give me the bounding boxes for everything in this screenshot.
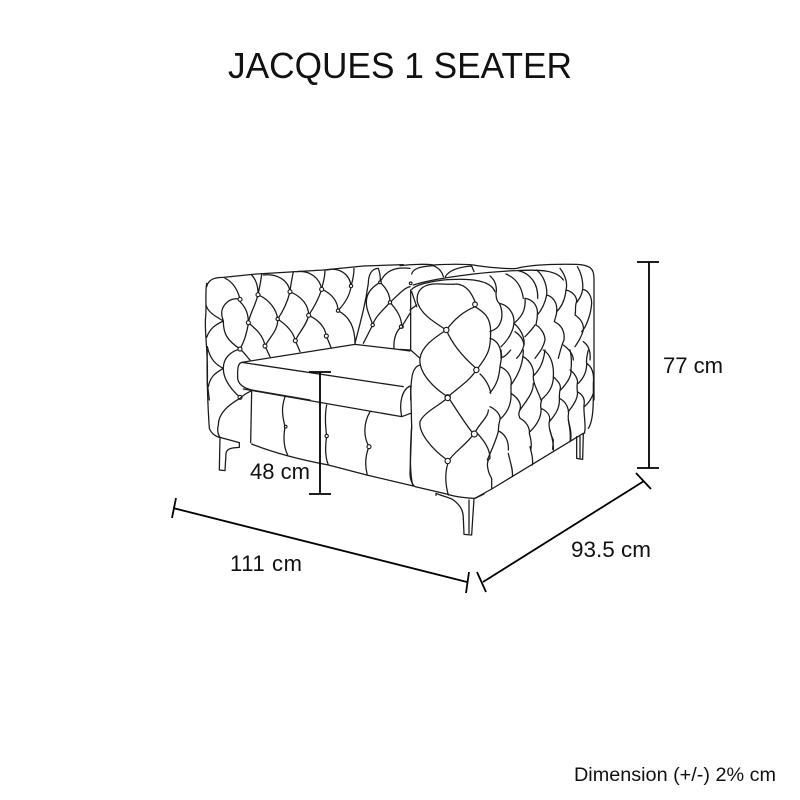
right top edge and front arm	[399, 264, 594, 400]
seat cushion	[238, 344, 410, 400]
dimension: width 111 cm	[172, 498, 469, 593]
dimension: seat height 48 cm: 48 cm	[250, 459, 310, 484]
dimension: width 111 cm: 111 cm	[230, 551, 302, 576]
front arm bottom, base edge and front leg	[410, 395, 583, 535]
seat base panel and left leg	[207, 350, 413, 486]
dimension: height 77 cm: 77 cm	[663, 353, 723, 378]
tolerance note: Dimension (+/-) 2% cm	[574, 764, 776, 786]
back and left arm tufting	[205, 265, 410, 400]
right side scalloped tufting upper	[490, 267, 592, 360]
dimension: depth 93.5 cm	[477, 473, 651, 592]
sofa line drawing	[205, 264, 594, 535]
dimension: seat height 48 cm	[250, 372, 331, 494]
right side scalloped tufting lower	[490, 350, 594, 450]
dimension: height 77 cm	[637, 262, 723, 468]
dimension: depth 93.5 cm: 93.5 cm	[571, 537, 651, 562]
title: JACQUES 1 SEATER	[228, 45, 572, 86]
